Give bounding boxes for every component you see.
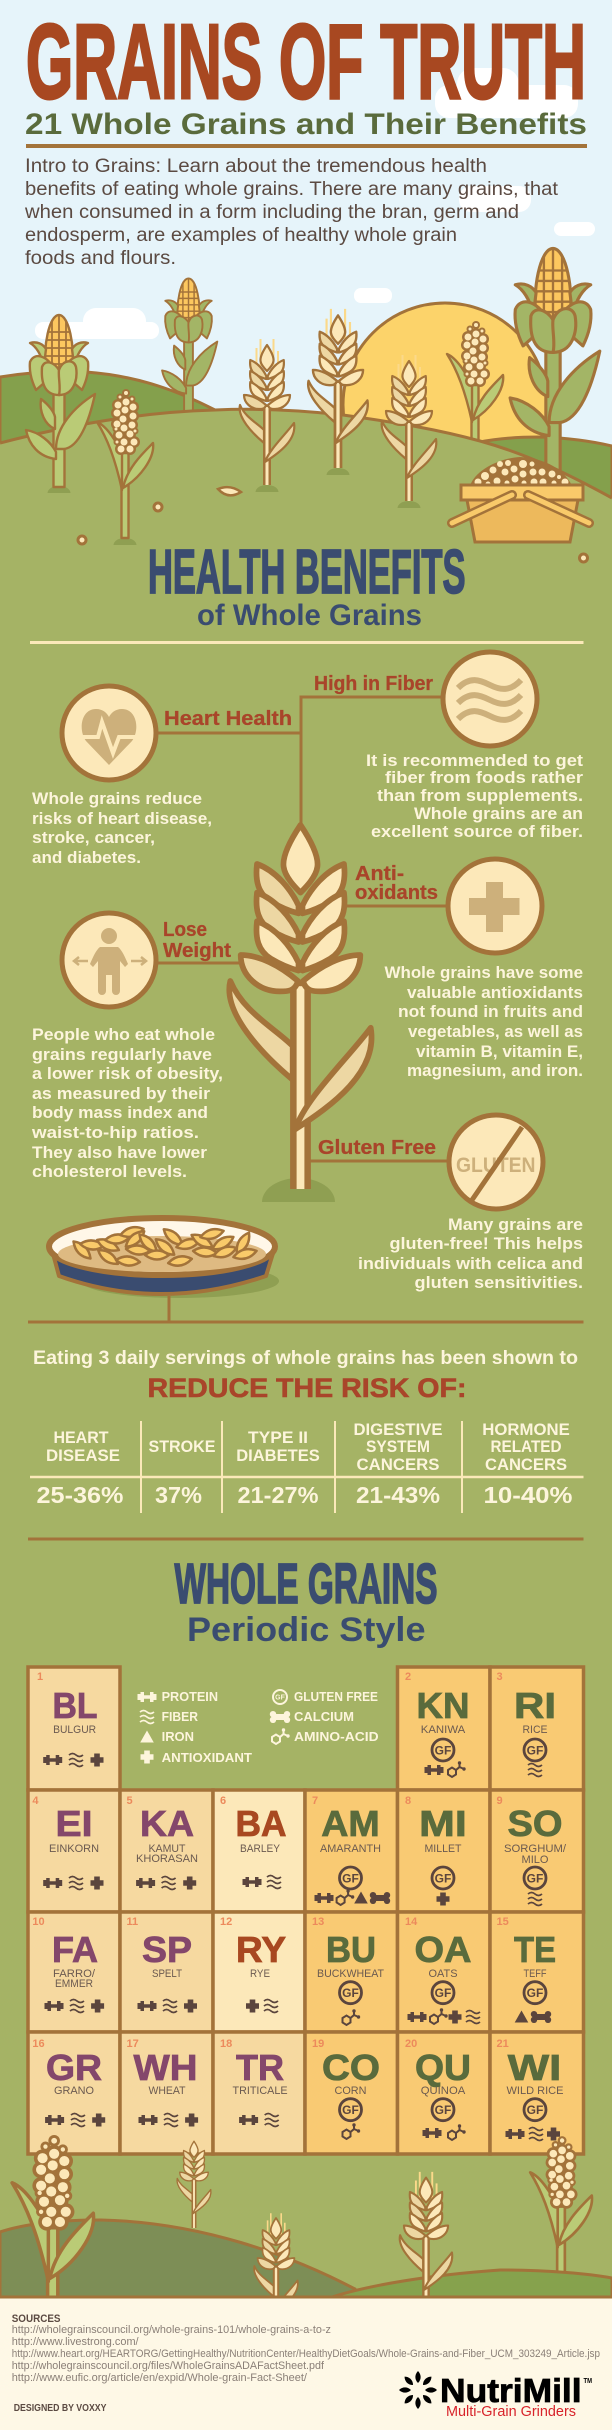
designer credit: DESIGNED BY VOXXY: [14, 2403, 107, 2414]
element: rice: 3: [496, 1671, 503, 1683]
sources: [12, 2313, 600, 2384]
element: wild rice: GF: [527, 2103, 543, 2117]
sorghum plant on sun: [447, 321, 503, 470]
element: barley: BARLEY: [240, 1843, 281, 1855]
benefit: antioxidants: Whole grains have some: [384, 963, 583, 982]
risk table: [30, 1420, 584, 1513]
benefit: gluten free: Many grains are: [448, 1215, 583, 1234]
risk table: CANCERS: [356, 1455, 440, 1474]
element: farro: 10: [32, 1916, 45, 1928]
risk table: RELATED: [490, 1437, 562, 1456]
element: spelt: SPELT: [152, 1968, 182, 1980]
risk table: 21-27%: [238, 1482, 318, 1508]
element: quinoa: [398, 2032, 490, 2154]
element: buckwheat: GF: [342, 1986, 359, 2000]
element: triticale: [213, 2032, 305, 2154]
benefit: high in fiber: fiber from foods rather: [385, 768, 583, 787]
risk table: CANCERS: [485, 1455, 567, 1474]
sky: [0, 0, 612, 500]
sun: [343, 303, 547, 507]
benefit: heart health: stroke, cancer,: [32, 828, 155, 847]
benefit: high in fiber: than from supplements.: [377, 786, 583, 805]
element: millet: 8: [405, 1795, 411, 1807]
connector lines: [158, 697, 448, 1161]
risk intro text: Eating 3 daily servings of whole grains has been shown to: [33, 1348, 578, 1369]
intro text: benefits of eating whole grains. There are many grains, that: [25, 179, 559, 200]
element: amaranth: AMARANTH: [320, 1843, 381, 1855]
element: spelt: [120, 1912, 213, 2032]
sources: http://wholegrainscouncil.org/whole-grains-101/whole-grains-a-to-z: [12, 2324, 331, 2336]
risk table: DIGESTIVE: [354, 1420, 442, 1439]
element: sorghum: GF: [527, 1871, 543, 1885]
element: grano: GR: [46, 2047, 102, 2088]
element: amaranth: [305, 1790, 398, 1912]
benefit: gluten free: gluten-free! This helps: [390, 1234, 583, 1253]
benefit: gluten free: individuals with celica and: [358, 1254, 583, 1273]
corn plant back right: [510, 248, 600, 472]
element: millet: [398, 1790, 490, 1912]
risk table: 37%: [155, 1482, 202, 1508]
element: kaniwa: KN: [416, 1685, 470, 1726]
risk table: HEART: [54, 1428, 109, 1447]
element: triticale: TRITICALE: [232, 2085, 288, 2097]
element: corn: CO: [322, 2047, 380, 2088]
element: oats: 14: [405, 1916, 418, 1928]
wheat plant two: [308, 309, 368, 468]
benefit: antioxidants: oxidants: [355, 882, 438, 904]
element: wild rice: WI: [508, 2047, 561, 2088]
element: farro: [28, 1912, 120, 2032]
element: barley: BA: [236, 1803, 286, 1844]
element: einkorn: EI: [56, 1803, 92, 1844]
benefit: lose weight: as measured by their: [32, 1084, 210, 1103]
element: buckwheat: [305, 1912, 398, 2032]
risk table: DIABETES: [236, 1446, 320, 1465]
benefit: heart health: Heart Health: [164, 708, 292, 730]
element: oats: [398, 1912, 490, 2032]
benefit: lose weight: [31, 913, 231, 1181]
clouds: [35, 68, 595, 339]
benefit: lose weight: a lower risk of obesity,: [32, 1064, 223, 1083]
legend: GLUTEN FREE: [294, 1689, 378, 1704]
element: spelt: 11: [126, 1916, 138, 1928]
risk table: 21-43%: [356, 1482, 440, 1508]
legend: PROTEIN: [162, 1689, 218, 1704]
element: kaniwa: [398, 1667, 490, 1790]
element: grano: 16: [32, 2038, 45, 2050]
subheading: of whole grains: of Whole Grains: [197, 599, 422, 632]
bottom wheat small: [177, 2141, 211, 2228]
sorghum plant front: [97, 389, 153, 538]
bottom hill right: [332, 2270, 612, 2300]
intro text: [24, 156, 559, 269]
logo: nutrimill: TM: [584, 2378, 592, 2385]
element: oats: OATS: [428, 1968, 458, 1980]
element: teff: GF: [527, 1986, 543, 2000]
benefit: high in fiber: [314, 652, 583, 841]
element: quinoa: 20: [405, 2038, 417, 2050]
benefit: antioxidants: vegetables, as well as: [408, 1022, 583, 1041]
element: barley: [213, 1790, 305, 1912]
element: buckwheat: 13: [312, 1916, 324, 1928]
element: buckwheat: BU: [326, 1929, 376, 1970]
benefit: gluten free: Gluten Free: [318, 1137, 436, 1159]
intro text: endosperm, are examples of healthy whole grain: [25, 225, 457, 246]
element: farro: FA: [52, 1929, 98, 1970]
element: einkorn: EINKORN: [49, 1843, 99, 1855]
benefit: lose weight: waist-to-hip ratios.: [31, 1123, 199, 1142]
risk table: STROKE: [148, 1437, 216, 1456]
element: kamut khorasan: 5: [126, 1795, 133, 1807]
element: wheat: WH: [134, 2047, 198, 2088]
element: barley: 6: [220, 1795, 226, 1807]
element: rice: RICE: [522, 1724, 548, 1736]
element: kaniwa: GF: [435, 1743, 451, 1757]
back hill left: [0, 372, 215, 470]
legend: AMINO-ACID: [294, 1729, 379, 1744]
intro text: when consumed in a form including the bran, germ and: [24, 202, 519, 223]
element: corn: GF: [342, 2103, 359, 2117]
scattered seeds: [78, 487, 588, 562]
intro text: foods and flours.: [25, 248, 176, 269]
element: kaniwa: 2: [405, 1671, 411, 1683]
element: bulgur: BULGUR: [53, 1724, 96, 1736]
risk table: 10-40%: [484, 1482, 572, 1508]
risk table: 25-36%: [36, 1482, 124, 1508]
element: sorghum: SORGHUM/: [504, 1843, 567, 1855]
element: wild rice: [490, 2032, 584, 2154]
element: spelt: SP: [142, 1929, 192, 1970]
element: amaranth: AM: [321, 1803, 380, 1844]
element: wheat: WHEAT: [148, 2085, 186, 2097]
benefit: high in fiber: Whole grains are an: [414, 804, 583, 823]
benefit: lose weight: grains regularly have: [32, 1045, 212, 1064]
basket of grain: [452, 457, 589, 542]
bottom wheat large: [400, 2172, 452, 2312]
mounds: [48, 468, 420, 545]
element: teff: TE: [514, 1929, 556, 1970]
subtitle: 21 Whole Grains and Their Benefits: [25, 108, 587, 141]
element: farro: FARRO/: [53, 1968, 96, 1980]
risk table: TYPE II: [248, 1428, 308, 1447]
element: farro: EMMER: [55, 1978, 93, 1990]
element: grano: GRANO: [54, 2085, 94, 2097]
central wheat plant: [229, 825, 372, 1189]
legend: [138, 1689, 379, 1765]
element: kamut khorasan: KA: [140, 1803, 194, 1844]
element: sorghum: [490, 1790, 584, 1912]
logo: nutrimill: NutriMill: [440, 2372, 582, 2409]
element: rice: GF: [527, 1743, 543, 1757]
heading: whole grains: WHOLE GRAINS: [174, 1552, 438, 1616]
element: kamut khorasan: KAMUT: [148, 1843, 186, 1855]
wheat plant three: [382, 355, 436, 501]
element: buckwheat: BUCKWHEAT: [317, 1968, 384, 1980]
benefit: heart health: Whole grains reduce: [32, 789, 202, 808]
legend: IRON: [162, 1729, 194, 1744]
sources: http://wholegrainscouncil.org/files/WholeGrainsADAFactSheet.pdf: [12, 2360, 325, 2372]
title rule: [26, 144, 587, 148]
element: rice: [490, 1667, 584, 1790]
sources: http://www.livestrong.com/: [12, 2336, 140, 2348]
bottom wheat middle: [254, 2213, 298, 2330]
element: quinoa: GF: [435, 2103, 451, 2117]
element: amaranth: GF: [342, 1871, 359, 1885]
bottom hill dark: [0, 2220, 360, 2300]
footer panel: [0, 2298, 612, 2430]
element: millet: GF: [435, 1871, 451, 1885]
periodic table: [28, 1667, 584, 2154]
benefit: heart health: risks of heart disease,: [32, 809, 212, 828]
benefit: lose weight: People who eat whole: [32, 1025, 215, 1044]
element: wild rice: 21: [496, 2038, 509, 2050]
benefit: lose weight: body mass index and: [32, 1103, 208, 1122]
corn plant front: [26, 315, 95, 487]
wheat plant one: [240, 339, 294, 485]
element: quinoa: QU: [415, 2047, 471, 2088]
element: teff: TEFF: [524, 1968, 547, 1980]
sources: http://www.eufic.org/article/en/expid/Whole-grain-Fact-Sheet/: [12, 2372, 308, 2384]
front hill: [0, 409, 612, 640]
risk table: HORMONE: [482, 1420, 570, 1439]
risk heading: REDUCE THE RISK OF:: [148, 1373, 466, 1403]
element: rye: RY: [236, 1929, 286, 1970]
benefit: lose weight: Lose: [163, 919, 207, 941]
element: rye: [213, 1912, 305, 2032]
element: bulgur: 1: [37, 1671, 43, 1683]
element: teff: 15: [496, 1916, 509, 1928]
element: einkorn: [28, 1790, 120, 1912]
element: grano: [28, 2032, 120, 2154]
element: teff: [490, 1912, 584, 2032]
benefit: antioxidants: valuable antioxidants: [407, 983, 583, 1002]
benefit: lose weight: cholesterol levels.: [32, 1162, 187, 1181]
benefit: gluten free: GLUTEN: [456, 1154, 536, 1177]
benefit: antioxidants: magnesium, and iron.: [407, 1061, 583, 1080]
intro text: Intro to Grains: Learn about the tremendous health: [25, 156, 487, 177]
element: rye: 12: [220, 1916, 232, 1928]
element: triticale: 18: [220, 2038, 232, 2050]
benefit: heart health: and diabetes.: [32, 848, 141, 867]
element: kamut khorasan: KHORASAN: [136, 1853, 198, 1865]
element: sorghum: SO: [508, 1803, 562, 1844]
element: sorghum: MILO: [522, 1854, 549, 1866]
element: oats: GF: [435, 1986, 451, 2000]
element: millet: MILLET: [424, 1843, 462, 1855]
element: bulgur: BL: [52, 1685, 98, 1726]
element: quinoa: QUINOA: [421, 2085, 466, 2097]
benefit: antioxidants: [355, 859, 583, 1080]
benefit: gluten free: [318, 1115, 583, 1292]
corn plant back left: [162, 278, 217, 416]
benefit: antioxidants: not found in fruits and: [398, 1002, 583, 1021]
element: corn: CORN: [334, 2085, 367, 2097]
element: wheat: 17: [126, 2038, 139, 2050]
benefit: gluten free: gluten sensitivities.: [414, 1273, 583, 1292]
bowl of grain: [49, 1218, 279, 1298]
element: bulgur: [28, 1667, 120, 1790]
subheading: periodic style: Periodic Style: [187, 1611, 426, 1649]
element: wheat: [120, 2032, 213, 2154]
benefit: lose weight: They also have lower: [32, 1143, 207, 1162]
sources: SOURCES: [12, 2313, 60, 2325]
bottom sorghum right: [530, 2136, 592, 2300]
element: sorghum: 9: [496, 1795, 503, 1807]
element: einkorn: 4: [32, 1795, 39, 1807]
element: rye: RYE: [250, 1968, 270, 1980]
risk table: DISEASE: [46, 1446, 120, 1465]
element: corn: 19: [312, 2038, 324, 2050]
bottom sorghum left: [12, 2135, 94, 2351]
logo: nutrimill: Multi-Grain Grinders: [446, 2403, 576, 2420]
benefit: antioxidants: Anti-: [355, 863, 404, 885]
element: rice: RI: [514, 1685, 556, 1726]
benefit: high in fiber: High in Fiber: [314, 673, 433, 695]
benefit: lose weight: Weight: [163, 940, 231, 962]
element: oats: OA: [414, 1929, 472, 1970]
benefit: high in fiber: It is recommended to get: [366, 751, 583, 770]
benefit: high in fiber: excellent source of fiber.: [371, 822, 583, 841]
element: millet: MI: [419, 1803, 467, 1844]
element: wild rice: WILD RICE: [506, 2085, 564, 2097]
legend: GF: [275, 1694, 286, 1702]
element: corn: [305, 2032, 398, 2154]
element: amaranth: 7: [312, 1795, 318, 1807]
legend: ANTIOXIDANT: [162, 1750, 252, 1765]
benefit: antioxidants: vitamin B, vitamin E,: [416, 1042, 583, 1061]
legend: CALCIUM: [294, 1709, 354, 1724]
central wheat mound: [262, 1178, 335, 1202]
back hill right: [480, 437, 612, 500]
element: triticale: TR: [236, 2047, 284, 2088]
benefit: heart health: [32, 686, 292, 867]
element: kamut khorasan: [120, 1790, 213, 1912]
element: kaniwa: KANIWA: [421, 1724, 466, 1736]
logo: nutrimill: [399, 2371, 592, 2420]
legend: FIBER: [162, 1709, 199, 1724]
risk table: SYSTEM: [366, 1437, 430, 1456]
